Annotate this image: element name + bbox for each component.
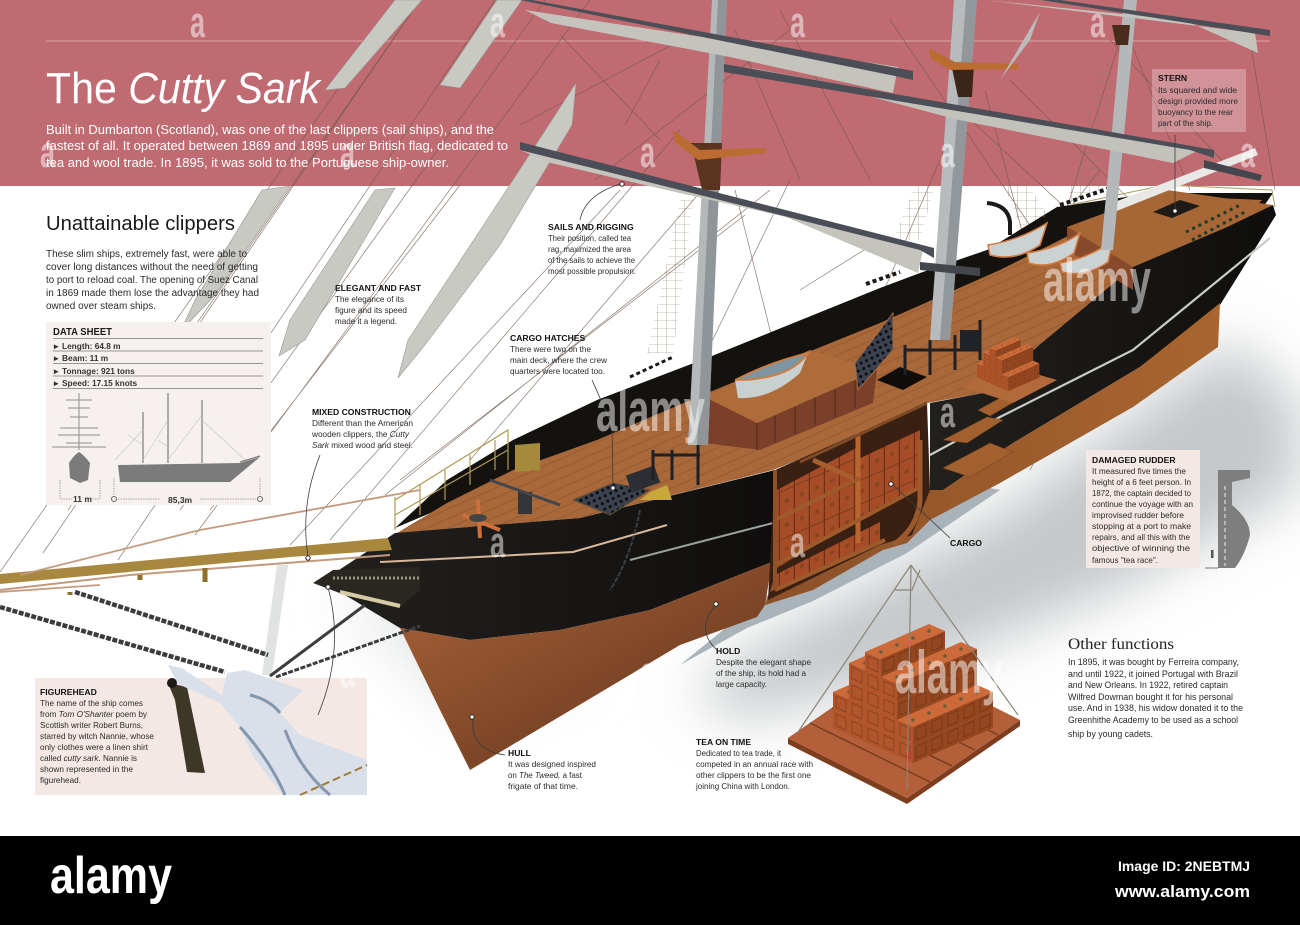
watermarks: a (640, 128, 655, 177)
callout: hold: Despite the elegant shape (716, 657, 811, 667)
text: other functions: Wilfred Dowman bought it for his personal (1068, 692, 1233, 702)
stock footer bar: www.alamy.com (1114, 882, 1250, 901)
poop deck (1067, 190, 1273, 267)
callout: mixed construction: wooden clippers, the Cutty (311, 429, 410, 439)
callout: cargo hatches: main deck, where the crew (510, 355, 608, 365)
callout: sails and rigging: of the sails to achieve the (548, 255, 635, 265)
icon: rudder diagram (1205, 470, 1250, 568)
dimensions: 11 m (73, 494, 92, 504)
callout: tea on time: competed in an annual race with (696, 759, 813, 769)
hull: after section black (930, 205, 1276, 490)
callout: figurehead (40, 687, 154, 785)
watermarks: a (340, 648, 355, 697)
callout: mixed construction: Sark mixed wood and steel. (312, 440, 413, 450)
callout: damaged rudder: objective of winning the (1092, 543, 1190, 553)
intro text: fastest of all. It operated between 1869 and 1895 under British flag, dedicated to (46, 138, 508, 153)
ratlines (647, 60, 1115, 353)
text: unattainable clippers: owned over steam ships. (46, 301, 156, 312)
callout: tea on time (695, 737, 813, 791)
data sheet: Length: 64.8 m (62, 341, 121, 351)
stock footer bar: alamy (50, 847, 172, 905)
callout: elegant and fast: figure and its speed (335, 305, 407, 315)
panel: stern note background (1152, 69, 1246, 132)
callout: cargo hatches: CARGO HATCHES (510, 333, 586, 343)
crates on deck (963, 337, 1057, 403)
callout: mixed construction: Different than the American (312, 418, 413, 428)
callout: cargo hatches: There were two on the (510, 344, 591, 354)
stock footer bar (0, 836, 1300, 925)
callout: elegant and fast: ELEGANT AND FAST (335, 283, 422, 293)
near bow hull copper (400, 562, 772, 770)
hull: far bulwark (395, 193, 1273, 528)
callout: figurehead: starred by witch Nannie, whose (40, 731, 154, 741)
data sheet: Tonnage: 921 tons (62, 366, 135, 376)
data sheet: DATA SHEET (53, 327, 112, 338)
callout: hull: HULL (508, 748, 531, 758)
sail strips at far left (180, 0, 576, 378)
callout: stern: Its squared and wide (1158, 85, 1237, 95)
stock footer bar: Image ID: 2NEBTMJ (1118, 858, 1250, 874)
intro text (46, 122, 508, 170)
callout: hold: large capacity. (716, 679, 767, 689)
callout: damaged rudder: It measured five times the (1092, 466, 1186, 476)
text: other functions (1068, 657, 1243, 739)
dimensions (60, 478, 262, 505)
callout dots (306, 182, 1177, 719)
callout: sails and rigging: SAILS AND RIGGING (548, 222, 634, 232)
callout: stern: design provided more (1158, 96, 1238, 106)
callout: stern (1158, 73, 1238, 128)
callout: hold: HOLD (716, 646, 740, 656)
callout: damaged rudder: height of a 6 feet person. In (1092, 477, 1191, 487)
text: unattainable clippers (46, 249, 259, 312)
callout: hull (508, 748, 596, 791)
callout: stern: buoyancy to the rear (1158, 107, 1233, 117)
hatch and mainmast deck gear (855, 313, 980, 390)
text: unattainable clippers: to port to reload coal. The opening of Suez Canal (46, 275, 258, 286)
callout: damaged rudder: improvised rudder before (1092, 510, 1184, 520)
callout: damaged rudder: continue the voyage with an (1092, 499, 1193, 509)
callout: figurehead: only clothes were a linen shirt (40, 742, 149, 752)
bow railing (395, 430, 508, 530)
callout: sails and rigging: rag, maximized the area (548, 244, 631, 254)
watermarks: alamy (1043, 247, 1151, 314)
panel: data sheet background (46, 322, 271, 505)
rigging lines (0, 0, 1275, 572)
callout: hold (716, 646, 811, 689)
ground shadow (330, 340, 1300, 720)
callout: stern: STERN (1158, 73, 1187, 83)
callout: tea on time: Dedicated to tea trade, it (696, 748, 782, 758)
lifeboats (988, 223, 1113, 274)
callout: tea on time: other clippers to be the first one (696, 770, 811, 780)
panel: rudder background (1086, 450, 1200, 568)
callout: sails and rigging (548, 222, 636, 276)
front view ship (52, 393, 106, 483)
text: other functions: and New Orleans. In 1922, retired captain (1068, 680, 1228, 690)
watermarks: a (490, 518, 505, 567)
watermarks: alamy (895, 639, 1003, 706)
stovepipe (987, 203, 1010, 235)
text: unattainable clippers: cover long distances without the need of getting (46, 262, 258, 273)
text: other functions: use. And in 1938, his widow donated it to the (1068, 703, 1243, 713)
callout: hull: frigate of that time. (508, 781, 578, 791)
text: other functions: ship by young cadets. (1068, 729, 1153, 739)
callout: figurehead: Scottish writer Robert Burns, (40, 720, 143, 730)
callout: figurehead: The name of the ship comes (40, 698, 144, 708)
watermarks: a (40, 128, 55, 177)
callout: figurehead: shown represented in the (40, 764, 133, 774)
furled sails and yards (520, 0, 1270, 276)
callout: figurehead: from Tom O'Shanter poem by (40, 709, 148, 719)
text: unattainable clippers: in 1869 made them lose the advantage they had (46, 288, 259, 299)
callout: cargo hatches: quarters were located too. (510, 366, 605, 376)
mast tops (673, 25, 1130, 190)
data sheet: ▸ (53, 353, 59, 363)
callout: tea on time: joining China with London. (695, 781, 790, 791)
data sheet: Beam: 11 m (62, 353, 108, 363)
callout: elegant and fast: made it a legend. (335, 316, 397, 326)
text: other functions: In 1895, it was bought by Ferreira company, (1068, 657, 1239, 667)
stern rail and hatch (1070, 148, 1275, 240)
text: other functions: and until 1922, it joined Portugal with Brazil (1068, 669, 1238, 679)
callout: hull: on The Tweed, a fast (508, 770, 583, 780)
callout: elegant and fast: The elegance of its (335, 294, 405, 304)
callout: mixed construction: MIXED CONSTRUCTION (312, 407, 411, 417)
watermarks: a (940, 128, 955, 177)
callout: figurehead: FIGUREHEAD (40, 687, 97, 697)
watermarks: a (940, 388, 955, 437)
intro text: tea and wool trade. In 1895, it was sold to the Portuguese ship-owner. (46, 155, 449, 170)
stripe, rail and bow ornament (313, 523, 773, 607)
heading: unattainable clippers: Unattainable clippers (46, 213, 235, 235)
callout: damaged rudder: 1872, the captain decided to (1092, 488, 1191, 498)
data sheet: Speed: 17.15 knots (62, 378, 138, 388)
near bow hull black (336, 470, 775, 640)
callout: damaged rudder: famous "tea race". (1092, 555, 1158, 565)
main deck (397, 195, 1262, 533)
masts (688, 0, 1137, 445)
callout: figurehead: called cutty sark. Nannie is (40, 753, 138, 763)
dimensions: 85,3m (168, 495, 193, 505)
callout: figurehead: figurehead. (40, 775, 81, 785)
callout: sails and rigging: Their position, called tea (548, 233, 631, 243)
watermarks (40, 0, 1255, 706)
callout: damaged rudder: repairs, and all this with the (1092, 532, 1190, 542)
heading: other functions: Other functions (1068, 636, 1174, 653)
callout: cargo: CARGO (950, 538, 982, 548)
callout: mixed construction (311, 407, 413, 450)
deadeye rails (630, 188, 1110, 377)
watermarks: alamy (596, 377, 705, 444)
tea pallet illustration (788, 565, 1020, 804)
callout: damaged rudder: DAMAGED RUDDER (1092, 455, 1176, 465)
callout: cargo hatches (510, 333, 608, 376)
intro text: Built in Dumbarton (Scotland), was one of the last clippers (sail ships), and the (46, 122, 494, 137)
title: The Cutty Sark (46, 64, 322, 113)
capstan, grate and deck machinery (463, 443, 700, 538)
callout: tea on time: TEA ON TIME (696, 737, 751, 747)
white stripe (930, 238, 1270, 455)
bowsprit (0, 490, 420, 675)
cargo shelves on side (943, 398, 1014, 477)
data sheet (52, 327, 263, 505)
callout: sails and rigging: most possible propulsion. (548, 266, 636, 276)
panel: figurehead background (35, 678, 367, 795)
watermarks: a (640, 648, 655, 697)
figurehead illustration (167, 665, 367, 795)
data sheet: ▸ (53, 378, 59, 388)
watermarks: a (790, 518, 805, 567)
callout: elegant and fast (335, 283, 422, 326)
text: other functions: Greenhithe Academy to be used as a school (1068, 715, 1238, 725)
callout: hull: It was designed inspired (508, 759, 596, 769)
cutaway cargo hold (768, 403, 930, 600)
hull: after section brown (765, 303, 1220, 605)
side view ship (115, 393, 260, 482)
watermarks: a (340, 128, 355, 177)
callout: stern: part of the ship. (1158, 118, 1213, 128)
watermarks: a (1240, 128, 1255, 177)
callout leader lines (306, 135, 1175, 755)
callout: damaged rudder (1092, 455, 1193, 565)
text: unattainable clippers: These slim ships, extremely fast, were able to (46, 249, 247, 260)
header band (0, 0, 1300, 186)
callout: damaged rudder: stopping at a port to make (1092, 521, 1191, 531)
deckhouse with boat (705, 350, 877, 450)
callout: hold: of the ship, its hold had a (716, 668, 806, 678)
data sheet: ▸ (53, 341, 59, 351)
anchor chains (0, 510, 640, 677)
data sheet: ▸ (53, 366, 59, 376)
